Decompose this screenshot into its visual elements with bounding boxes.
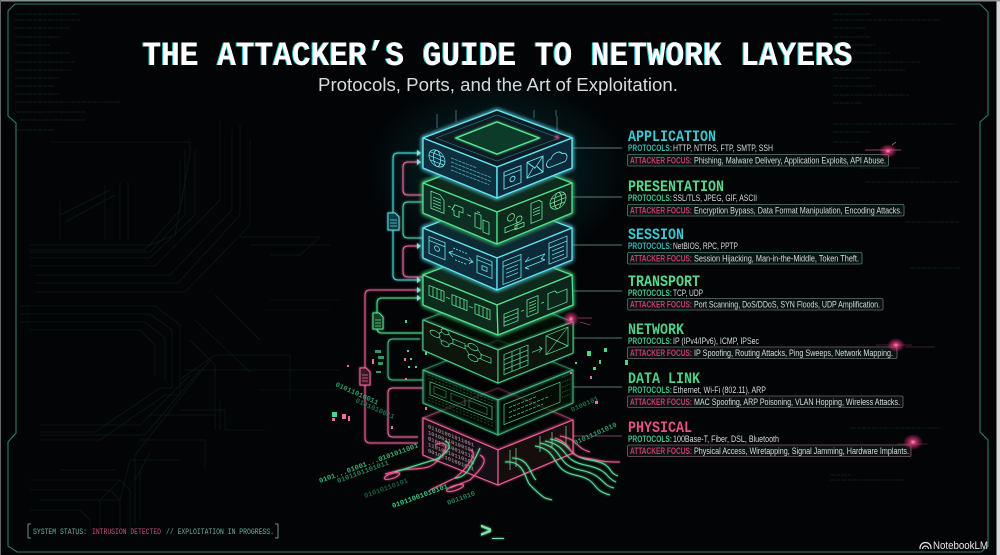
layer label: network: [628, 321, 897, 358]
attack spark near network: [876, 338, 935, 352]
layer: session block: [423, 200, 572, 290]
layer label: data link: [628, 370, 903, 408]
layer label: data link: Ethernet, Wi-Fi (802.11), ARP: [673, 385, 766, 395]
faint data log text marks, corners: [15, 14, 960, 480]
binary data streams: 01010110101: [363, 477, 409, 501]
layer label: physical: [628, 419, 911, 456]
layer: physical block: 10100110100101: [428, 429, 475, 455]
terminal prompt: >_: [480, 521, 505, 544]
attacker focus box: MAC Spoofing, ARP Poisoning, VLAN Hopping, Wireless Attacks.: [694, 397, 900, 407]
layer: physical block: 00101101001011: [428, 447, 475, 473]
protocols: PROTOCOLS:: [628, 193, 672, 203]
layer label: application: HTTP, NTTPS, FTP, SMTP, SSH: [673, 143, 773, 153]
attacker focus box: ATTACKER FOCUS:: [630, 446, 692, 456]
protocols: PROTOCOLS:: [628, 434, 672, 444]
layer label: transport: [628, 273, 883, 310]
layer label: presentation: SSL/TLS, JPEG, GIF, ASCII: [673, 193, 757, 203]
subtitle: Protocols, Ports, and the Art of Exploitation.: [318, 74, 678, 95]
heading: APPLICATION: [628, 128, 716, 146]
binary data streams: 0101...01001...0101011001: [318, 442, 420, 486]
connectors: left side data flows: [365, 150, 423, 443]
layer label: physical: 100Base-T, Fiber, DSL, Bluetooth: [673, 434, 779, 444]
attacker focus box: ATTACKER FOCUS:: [630, 205, 692, 215]
attacker focus box: [628, 347, 897, 358]
attacker focus box: ATTACKER FOCUS:: [630, 253, 692, 263]
title: THE ATTACKER’S GUIDE TO NETWORK LAYERS: [142, 38, 852, 76]
binary data streams: 0101101101011: [336, 460, 390, 486]
layer: physical block: 01011010010110: [428, 435, 475, 461]
attacker focus box: ATTACKER FOCUS:: [630, 397, 692, 407]
connectors: right side to labels: [572, 148, 622, 436]
protocols: PROTOCOLS:: [628, 336, 672, 346]
layer label: session: NetBIOS, RPC, PPTP: [673, 241, 738, 251]
attacker focus box: Phishing, Malware Delivery, Application Exploits, API Abuse.: [694, 155, 886, 165]
system status line: INTRUSION DETECTED: [92, 528, 161, 537]
attacker focus box: [628, 396, 903, 408]
heading: PHYSICAL: [628, 419, 692, 437]
glow behind the stack: [363, 75, 633, 265]
layer label: session: [628, 226, 862, 264]
scattered data particles: [332, 320, 628, 429]
layer: network block: [423, 292, 573, 383]
circuit board background pattern: [20, 120, 340, 530]
layer: data link block: [423, 340, 573, 435]
binary data streams: 01011001010101: [391, 483, 449, 511]
heading: SESSION: [628, 226, 684, 244]
layer label: application: [628, 128, 888, 166]
binary data streams: 01011101010: [573, 422, 618, 448]
heading: DATA LINK: [628, 370, 700, 388]
binary data streams: 0011010: [446, 490, 477, 508]
faint vertical ticks above the stack: [437, 110, 557, 130]
attacker focus box: [628, 298, 883, 310]
attacker focus box: ATTACKER FOCUS:: [630, 155, 692, 165]
binary data streams: [318, 381, 618, 511]
icon: pink document: [360, 368, 370, 385]
attacker focus box: Physical Access, Wiretapping, Signal Jamming, Hardware Implants.: [694, 446, 909, 456]
attacker focus box: [628, 252, 862, 264]
protocols: PROTOCOLS:: [628, 385, 672, 395]
attack spark on the stack: [563, 311, 592, 327]
system status line: [28, 524, 278, 538]
attack spark near physical: [897, 434, 927, 450]
icon: green document: [373, 313, 383, 329]
attacker focus box: ATTACKER FOCUS:: [630, 348, 692, 358]
layer: presentation block: [423, 155, 572, 244]
layer: application block: [423, 110, 572, 198]
layer label: network: IP (IPv4/IPv6), ICMP, IPSec: [673, 336, 759, 346]
NotebookLM logo: NotebookLM: [933, 540, 988, 552]
icons on the left face: [429, 147, 491, 188]
layer label: transport: TCP, UDP: [673, 288, 703, 298]
attack spark on the application corner: [553, 133, 561, 141]
layer: transport block: [423, 247, 573, 335]
inner top face panel: [436, 115, 559, 161]
attacker focus box: ATTACKER FOCUS:: [630, 299, 692, 309]
layer: physical block: 11010010110100: [428, 441, 475, 467]
protocols: PROTOCOLS:: [628, 241, 672, 251]
attacker focus box: [628, 204, 904, 216]
attacker focus box: IP Spoofing, Routing Attacks, Ping Sweeps, Network Mapping.: [694, 348, 893, 358]
binary data streams: 01011010011: [334, 381, 379, 408]
attacker focus box: [628, 445, 911, 456]
wires leaving the physical block: [384, 436, 620, 500]
attack spark near application: [865, 142, 901, 158]
attacker focus box: [628, 154, 888, 166]
icons on the right face: [504, 147, 567, 189]
attacker focus box: Encryption Bypass, Data Format Manipulation, Encoding Attacks.: [694, 205, 902, 215]
heading: PRESENTATION: [628, 178, 724, 196]
system status line: SYSTEM STATUS:: [33, 528, 87, 537]
layer: physical block: 01101001011001: [428, 423, 475, 449]
protocols: PROTOCOLS:: [628, 143, 672, 153]
heading: NETWORK: [628, 321, 684, 339]
icon: teal document: [388, 213, 399, 230]
heading: TRANSPORT: [628, 273, 700, 291]
binary data streams: 0101010011: [354, 397, 395, 422]
system status line: // EXPLOITATION IN PROGRESS.: [166, 527, 274, 537]
layer: physical block: [423, 388, 573, 485]
layer label: presentation: [628, 178, 904, 216]
binary data streams: 0100101: [570, 395, 600, 415]
protocols: PROTOCOLS:: [628, 288, 672, 298]
attacker focus box: Session Hijacking, Man-in-the-Middle, Token Theft.: [694, 253, 859, 263]
attacker focus box: Port Scanning, DoS/DDoS, SYN Floods, UDP Amplification.: [694, 299, 880, 309]
